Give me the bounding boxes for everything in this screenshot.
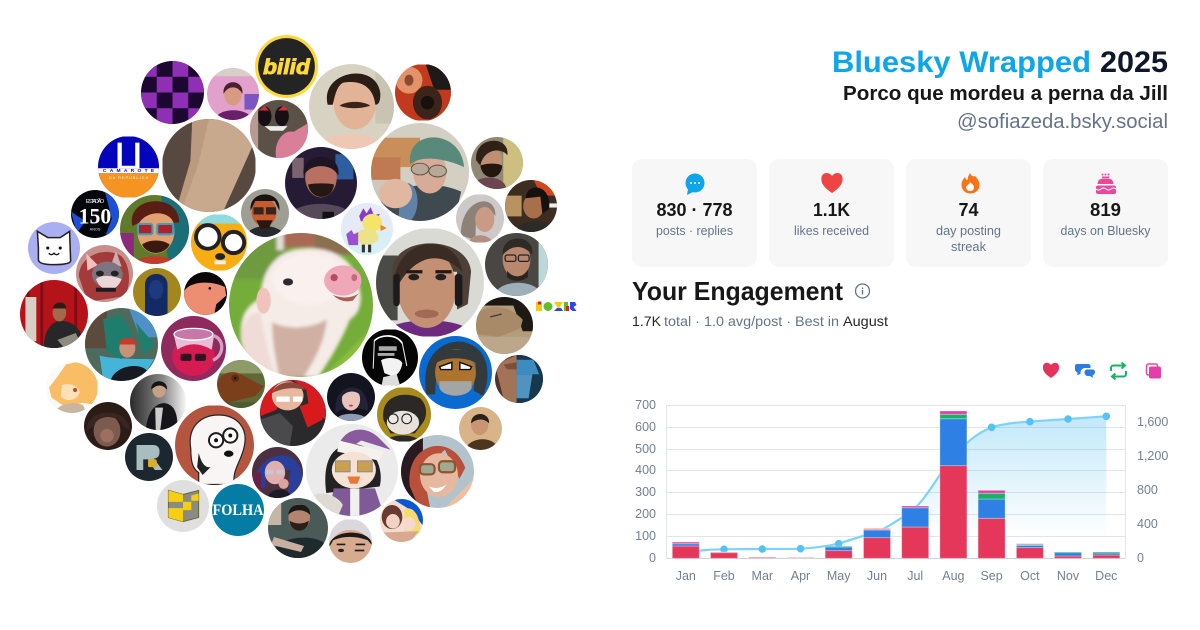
avatar: RR logo xyxy=(125,433,173,481)
right axis labels: 1,600 xyxy=(1137,415,1168,429)
avatar: man with glasses, grey shirt xyxy=(485,233,548,296)
bar: Jun xyxy=(864,528,890,558)
month labels: Nov xyxy=(1057,569,1080,583)
bar: Jan xyxy=(672,542,699,558)
avatar: Estadão 150: 150 xyxy=(79,204,111,229)
avatar: grey wolf in red hood xyxy=(76,245,133,302)
stat card: likes received: likes received xyxy=(794,223,869,238)
month labels: Jul xyxy=(907,569,923,583)
engagement summary: total · 1.0 avg/post · Best in xyxy=(664,313,839,329)
stat card: posts and replies xyxy=(632,159,757,267)
month labels: Dec xyxy=(1095,569,1117,583)
left axis labels: 700 xyxy=(635,398,656,412)
avatar: half sepia half blue man xyxy=(495,355,543,403)
avatar: Estadão 150: ANOS xyxy=(90,227,101,231)
avatar: bearded man with book xyxy=(268,498,328,558)
month labels: Oct xyxy=(1020,569,1040,583)
left axis labels: 100 xyxy=(635,529,656,543)
left axis labels xyxy=(635,398,656,565)
avatar: Camarote da República: DA REPÚBLICA xyxy=(109,175,149,180)
avatar: smiling woman on pink xyxy=(207,68,259,120)
month labels xyxy=(676,569,1117,583)
avatar: pink capybara on black xyxy=(184,272,227,315)
avatar: Folha logo xyxy=(212,484,264,536)
avatar: witch cartoon with glasses xyxy=(306,424,398,516)
bar: Nov xyxy=(1054,552,1082,558)
month labels: Jan xyxy=(676,569,696,583)
avatar: person with green hair xyxy=(371,123,469,221)
handle: @sofiazeda.bsky.social xyxy=(957,111,1168,133)
stat card: posting streak xyxy=(906,159,1031,267)
stat card: posting streak: streak xyxy=(951,239,986,254)
header xyxy=(832,46,1168,133)
month labels: Feb xyxy=(713,569,735,583)
avatar: Estadão 150 xyxy=(71,190,119,238)
avatar: Camarote da República xyxy=(98,136,159,198)
avatar: woman with dark curly hair xyxy=(84,402,132,450)
left axis labels: 200 xyxy=(635,507,656,521)
month labels: Mar xyxy=(752,569,773,583)
icon: info xyxy=(856,284,870,298)
display name: Porco que mordeu a perna da Jill xyxy=(843,83,1168,105)
avatar: dark blue portrait on gold xyxy=(133,268,181,316)
avatar: capybara photo xyxy=(476,297,533,354)
icon: likes heart xyxy=(1043,363,1059,378)
icon: reposts arrows xyxy=(1111,362,1126,380)
avatar: black and white anime girl xyxy=(362,329,418,386)
left axis labels: 600 xyxy=(635,420,656,434)
stat card: likes received: 1.1K xyxy=(813,200,850,220)
stat card: posts and replies: 830 · 778 xyxy=(656,200,732,220)
bar: Dec xyxy=(1093,552,1120,558)
avatar: yellow grey map icon xyxy=(157,480,209,532)
engagement chart xyxy=(635,398,1168,583)
avatar: bilid yellow logo: bilid xyxy=(263,55,311,79)
stat card: posts and replies: posts · replies xyxy=(656,223,733,238)
cumulative area xyxy=(686,416,1106,558)
stat card: posting streak: day posting xyxy=(936,223,1001,238)
stacked bars xyxy=(672,411,1120,558)
bar: Mar xyxy=(749,557,776,558)
avatar: woman with red hair and glasses xyxy=(401,435,474,508)
icon: birthday cake xyxy=(1096,174,1116,194)
avatar: Estadão 150: ESTADÃO xyxy=(86,198,104,205)
avatar: man in profile orange background xyxy=(505,180,557,232)
left axis labels: 500 xyxy=(635,442,656,456)
avatar: woman with blue hair xyxy=(252,447,303,498)
right axis labels: 1,200 xyxy=(1137,449,1168,463)
month labels: Sep xyxy=(980,569,1003,583)
engagement summary xyxy=(632,313,888,329)
heading: Your Engagement: Your Engagement xyxy=(632,276,843,306)
avatar: bilid yellow logo xyxy=(255,35,318,98)
avatar: yellow chocobo xyxy=(341,203,393,255)
engagement summary: August xyxy=(843,313,888,329)
icon: speech bubble xyxy=(686,174,704,195)
stat card: likes received xyxy=(769,159,894,267)
avatar: yellow dog with glasses xyxy=(191,214,247,270)
avatar: winking man close-up xyxy=(329,519,372,563)
avatar: white cat on lavender xyxy=(28,222,80,274)
month labels: Jun xyxy=(867,569,887,583)
avatar: brown cartoon man on blue xyxy=(419,336,492,409)
avatar: man with headset xyxy=(241,189,289,237)
avatar: man with pokémon statue xyxy=(85,308,158,381)
icon: replies bubbles xyxy=(1075,364,1095,378)
avatar: man with brown jacket xyxy=(459,407,502,450)
avatar bubble collage xyxy=(20,35,576,563)
avatar: Asian woman portrait xyxy=(327,373,375,421)
right axis labels: 800 xyxy=(1137,483,1158,497)
stat card: days on Bluesky: 819 xyxy=(1090,200,1121,220)
avatar: pink cartoon creature xyxy=(250,100,308,158)
engagement summary: 1.7K xyxy=(632,313,662,329)
avatar: chameleon xyxy=(217,360,265,408)
right axis labels xyxy=(1137,415,1168,565)
avatar: red dark pig photo xyxy=(395,64,451,120)
title: 2025 xyxy=(1100,46,1168,79)
avatar: Camarote da República: CAMAROTE xyxy=(103,168,155,174)
bar: Aug xyxy=(940,411,967,558)
avatar: anime person with round glasses xyxy=(377,387,431,442)
left axis labels: 300 xyxy=(635,485,656,499)
avatar: red and black anime man xyxy=(260,380,326,446)
month labels: May xyxy=(827,569,851,583)
right axis labels: 400 xyxy=(1137,517,1158,531)
line points xyxy=(720,412,1110,553)
grid lines xyxy=(666,405,1126,558)
avatar: photo of arm xyxy=(162,119,256,212)
bar: Sep xyxy=(978,490,1005,558)
avatar: purple checkerboard xyxy=(141,61,204,124)
avatar: red juice pitcher with glasses xyxy=(161,316,226,381)
bar: Jul xyxy=(902,506,929,558)
bar: Oct xyxy=(1016,544,1043,558)
avatar: cartoon with round glasses xyxy=(175,406,254,485)
avatar: grey-haired woman xyxy=(456,194,504,242)
avatar: man with neon lighting xyxy=(285,147,357,219)
avatar: man with moustache xyxy=(309,64,394,149)
right axis labels: 0 xyxy=(1137,551,1144,565)
right column xyxy=(600,0,1200,630)
bar: Apr xyxy=(787,557,814,558)
stat card: days on Bluesky xyxy=(1043,159,1168,267)
avatar: man in black suit xyxy=(130,374,186,430)
stat card: days on Bluesky: days on Bluesky xyxy=(1060,223,1151,238)
month labels: Aug xyxy=(942,569,965,583)
icon: flame xyxy=(962,173,980,194)
icon: heart xyxy=(821,173,843,193)
bar: May xyxy=(825,546,852,558)
bar: Feb xyxy=(710,552,738,558)
stat card: posting streak: 74 xyxy=(958,200,978,220)
avatar: bearded man with glasses xyxy=(471,137,523,189)
avatar: piglet close-up xyxy=(229,233,373,377)
icon: quotes squares xyxy=(1146,364,1161,378)
avatar: gov.br logo xyxy=(535,301,577,312)
avatar: orange haired anime girl xyxy=(46,362,98,413)
cumulative line xyxy=(686,416,1106,552)
left axis labels: 0 xyxy=(649,551,656,565)
avatar: young man with headphones xyxy=(376,228,484,336)
avatar: cartoon man with red glasses xyxy=(120,195,189,264)
month labels: Apr xyxy=(791,569,810,583)
avatar: two anime girls xyxy=(380,499,423,542)
title: Bluesky Wrapped xyxy=(832,46,1091,79)
chart legend icons xyxy=(1043,362,1161,380)
left axis labels: 400 xyxy=(635,463,656,477)
avatar: man on red curtain stage xyxy=(20,280,88,348)
